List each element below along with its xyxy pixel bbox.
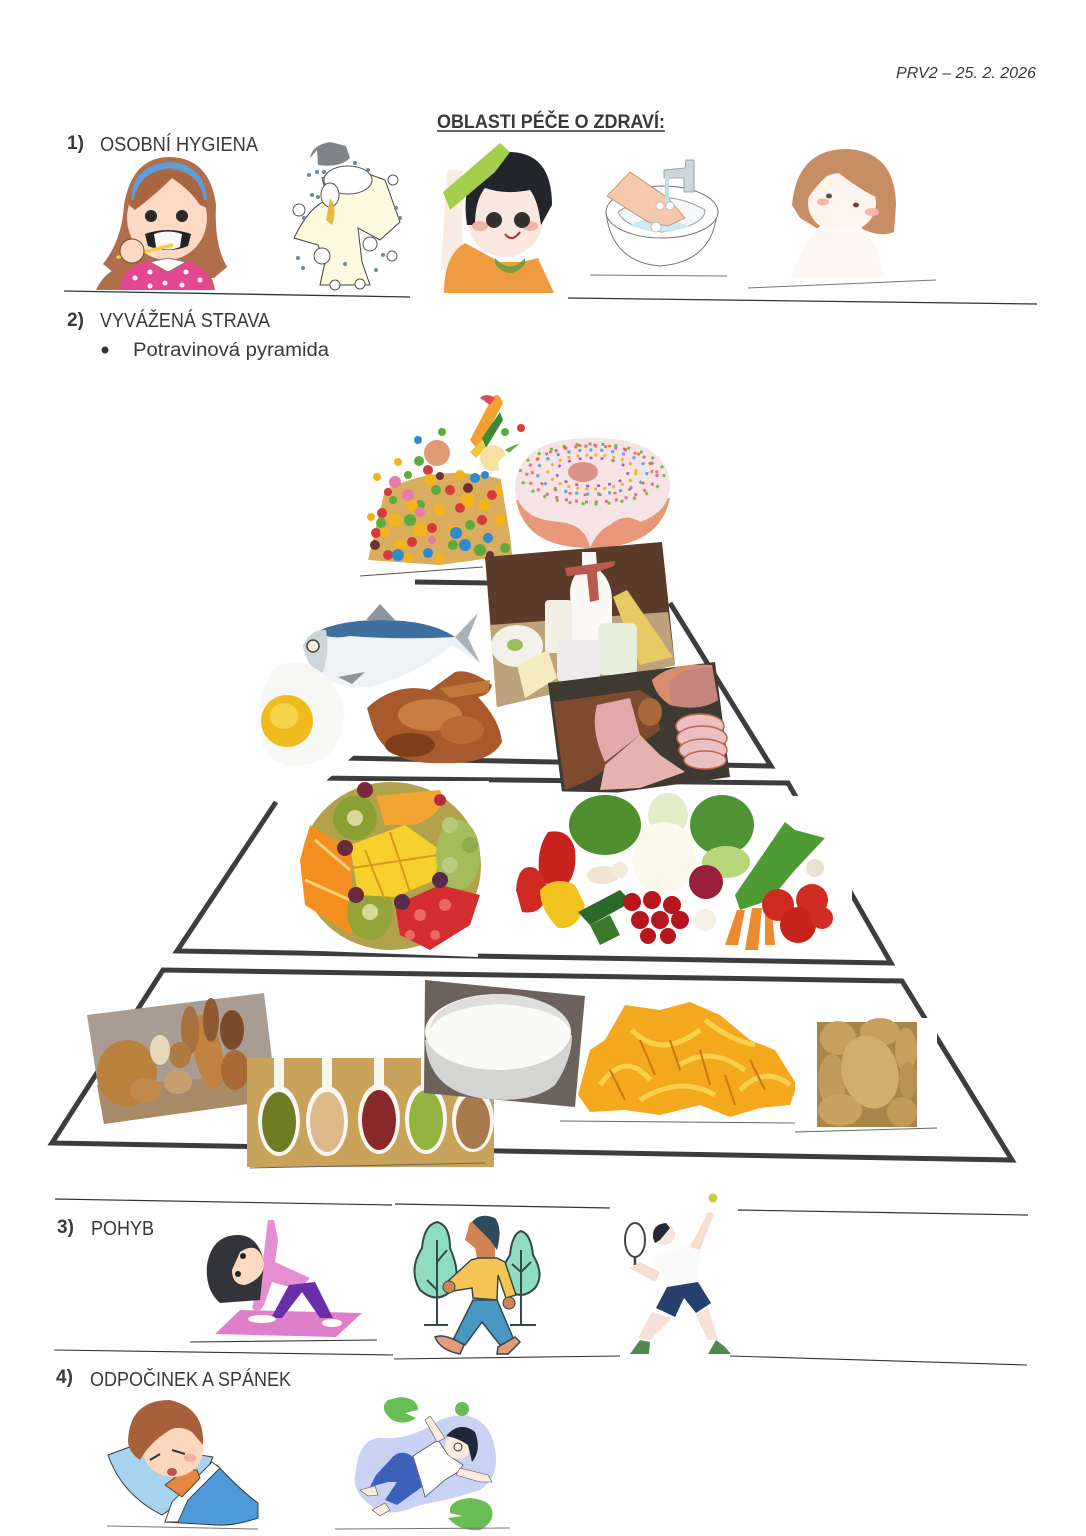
food: sweets photo — [360, 395, 532, 576]
section divider 1 — [64, 291, 1037, 304]
icon: girl doing yoga — [207, 1220, 362, 1337]
food: pasta — [578, 1002, 797, 1117]
heading: pohyb: 3) — [57, 1217, 74, 1238]
icon: girl brushing teeth — [96, 157, 227, 290]
section divider 3 — [54, 1340, 1027, 1365]
heading: pohyb: POHYB — [91, 1218, 154, 1240]
food: bread photo — [87, 993, 277, 1124]
heading: vyvážená strava: 2) — [67, 310, 84, 331]
icon: woman floating on water — [355, 1397, 496, 1530]
food: legumes photo — [247, 1058, 494, 1167]
food: fruit plate — [293, 781, 489, 957]
food: ham photo — [548, 662, 730, 800]
food: potatoes — [795, 1018, 937, 1132]
lines under sleep icons — [107, 1526, 510, 1529]
icon: man walking in park — [414, 1216, 540, 1354]
heading: pohyb — [57, 1217, 154, 1240]
food: vegetables — [490, 790, 852, 950]
date note: PRV2 – 25. 2. 2026 — [896, 65, 1036, 82]
icon: girl with towel — [790, 149, 896, 278]
food: egg — [210, 655, 365, 805]
lines under food — [250, 1121, 937, 1168]
heading: osobní hygiena: 1) — [67, 133, 84, 154]
heading: odpočinek a spánek: ODPOČINEK A SPÁNEK — [90, 1368, 292, 1391]
icon: hand washing — [606, 160, 718, 266]
food: dairy photo — [485, 542, 675, 707]
food: rice photo — [424, 980, 585, 1107]
food: donut — [498, 425, 690, 552]
icon: boy sleeping — [108, 1400, 258, 1525]
icon: child showering — [293, 142, 402, 290]
food: roast chicken — [367, 671, 502, 763]
lines under hygiene images — [590, 275, 936, 288]
food: fish — [303, 604, 480, 688]
heading: osobní hygiena: OSOBNÍ HYGIENA — [100, 133, 259, 156]
icon: boy combing hair — [441, 143, 554, 293]
title: OBLASTI PÉČE O ZDRAVÍ: — [437, 111, 665, 133]
icon: tennis player — [625, 1194, 731, 1354]
food pyramid outline — [52, 582, 1012, 1160]
heading: vyvážená strava: VYVÁŽENÁ STRAVA — [100, 309, 271, 332]
section divider 2 — [55, 1199, 1028, 1215]
bullet: potravinová pyramida: Potravinová pyramida — [133, 340, 329, 361]
heading: odpočinek a spánek: 4) — [56, 1367, 73, 1388]
